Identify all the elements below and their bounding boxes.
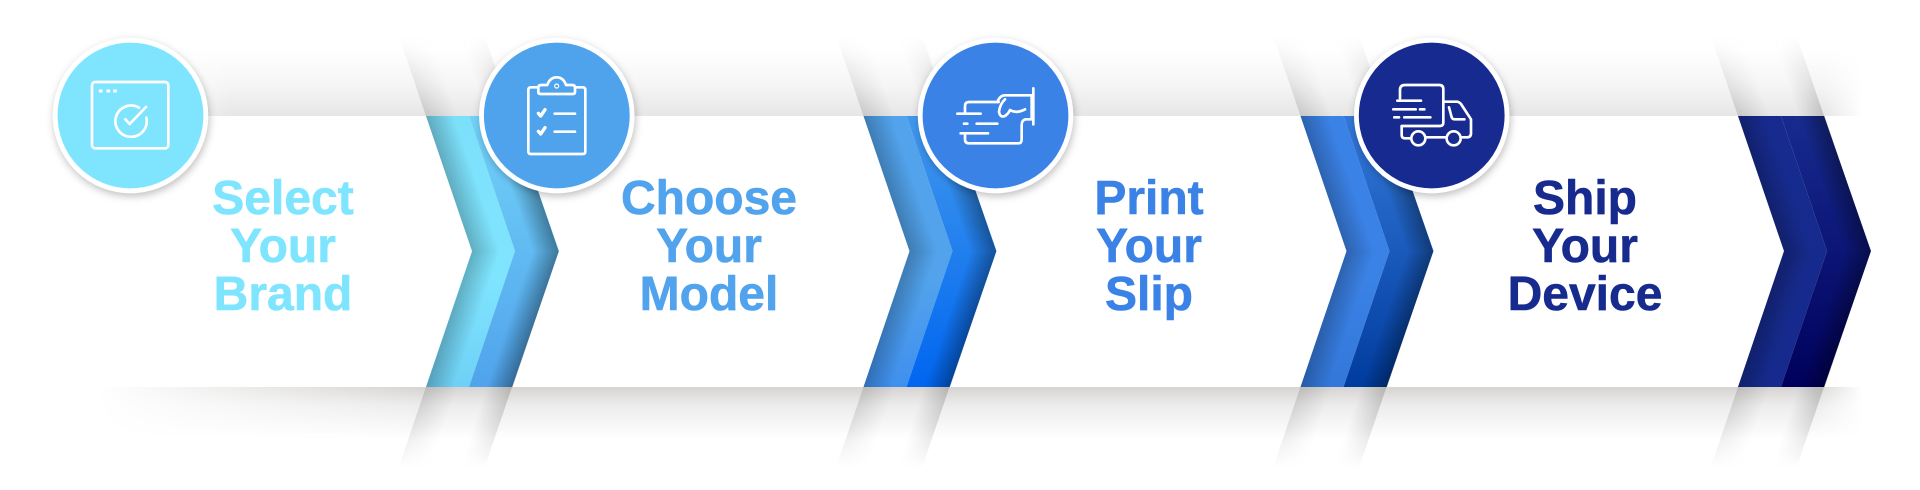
step 3 title: Slip (1105, 268, 1193, 321)
step 4 badge (1356, 40, 1507, 191)
step 4 title: Your (1532, 220, 1638, 273)
step 3 title: Print (1094, 172, 1204, 225)
step 4 title: Device (1508, 268, 1662, 321)
icon: hand passing a slip (957, 88, 1033, 143)
step 2 title: Choose (621, 172, 797, 225)
step 3 title: Your (1096, 220, 1202, 273)
step 4 title: Ship (1533, 172, 1637, 225)
chevron 4 (1716, 52, 1871, 456)
step 2 title: Model (640, 268, 778, 321)
icon: browser window with check (92, 82, 168, 148)
step 2 title: Your (656, 220, 762, 273)
step 1 title: Select (212, 172, 354, 225)
bottom band shadow (159, 387, 1853, 424)
step 2 badge (482, 40, 632, 191)
step 3 badge (920, 40, 1071, 191)
step 1 title: Brand (214, 268, 352, 321)
icon: clipboard checklist (528, 77, 585, 154)
icon: delivery truck (1393, 85, 1471, 145)
step 1 title: Your (230, 220, 336, 273)
step 1 badge (55, 40, 206, 191)
chevron 2 (842, 52, 996, 456)
chevron 3 (1278, 52, 1434, 456)
chevron 1 (404, 52, 559, 456)
top band shadow (204, 80, 1850, 116)
